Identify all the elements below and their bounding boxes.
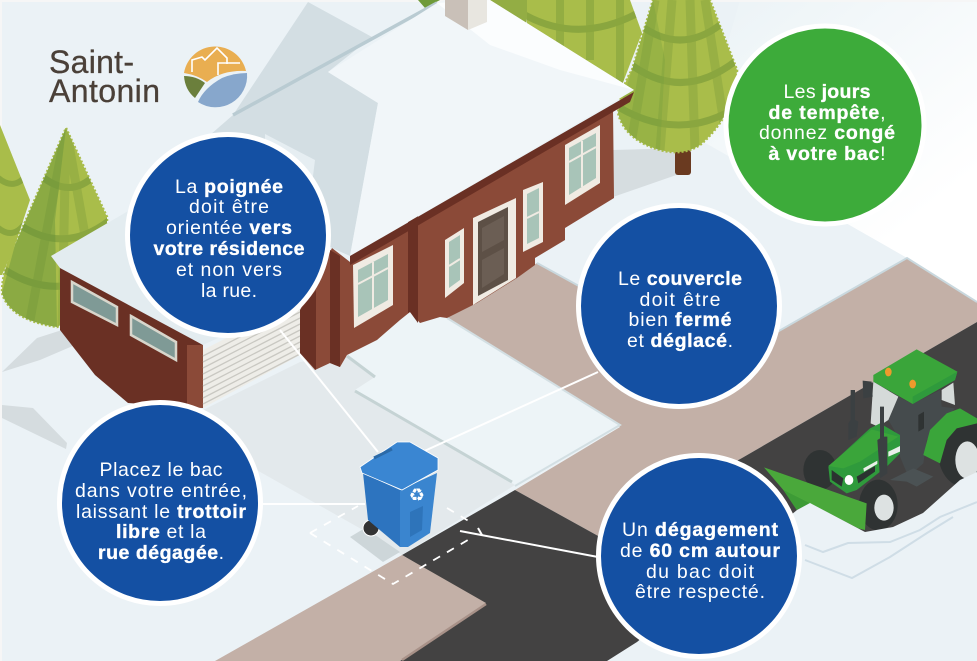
lawn right of walkway — [537, 140, 907, 364]
logo emblem — [184, 46, 247, 107]
callout: poignée: La poignée — [175, 176, 283, 198]
tree: left — [2, 128, 115, 330]
chimney — [445, 0, 487, 30]
bin body right — [400, 473, 437, 547]
callout: jours de tempête: à votre bac! — [768, 143, 886, 165]
callout: placez le bac: laissant le trottoir — [76, 501, 246, 523]
bin handle recess — [410, 506, 423, 537]
cab — [888, 390, 955, 477]
rear wheel — [938, 417, 977, 487]
front wheel — [859, 480, 898, 530]
callout: jours de tempête — [726, 26, 924, 224]
dashed 60 cm clearance — [310, 506, 473, 584]
callout: dégagement: du bac doit — [646, 561, 755, 583]
garage roof — [51, 175, 300, 345]
fender — [923, 408, 977, 463]
callout: dégagement — [598, 456, 800, 656]
beacons — [885, 368, 916, 388]
callout: poignée: orientée vers — [166, 217, 292, 239]
hood — [828, 423, 900, 493]
callout: placez le bac: rue dégagée. — [98, 542, 224, 564]
callout: poignée: doit être — [189, 196, 269, 218]
main roof — [328, 0, 634, 256]
cab door window — [918, 412, 924, 432]
logo — [49, 44, 247, 109]
sidewalk and walkway — [447, 258, 977, 537]
snow pile — [607, 472, 977, 661]
exhausts — [848, 390, 887, 478]
callout: couvercle — [578, 206, 780, 406]
door — [473, 198, 516, 305]
callout: couvercle: bien fermé — [628, 309, 732, 331]
callout: poignée — [128, 134, 328, 336]
window 2 — [445, 228, 464, 298]
callout: poignée: votre résidence — [154, 238, 305, 260]
lower sidewalk — [215, 555, 486, 661]
callout: dégagement: être respecté. — [635, 581, 765, 603]
house — [51, 0, 634, 408]
logo wordmark — [49, 44, 160, 109]
window 4 — [565, 125, 600, 205]
garage door — [203, 300, 300, 408]
callout: placez le bac: dans votre entrée, — [75, 480, 247, 502]
mirror — [863, 381, 873, 398]
logo wordmark: Saint- — [49, 44, 134, 80]
callout: jours de tempête: de tempête, — [768, 102, 886, 124]
logo wordmark: Antonin — [49, 73, 160, 109]
driveway — [203, 312, 620, 555]
shadows on snow — [2, 330, 75, 449]
plow — [764, 467, 867, 530]
garage window 2 — [131, 316, 176, 360]
callout: placez le bac — [60, 402, 260, 604]
blue recycling bin — [350, 442, 438, 562]
far front wheel — [803, 450, 837, 490]
tractor with plow — [764, 349, 977, 530]
bin lid — [360, 442, 438, 490]
garage pillar — [187, 345, 203, 408]
garage wall — [60, 262, 203, 408]
callout: jours de tempête: Les jours — [784, 81, 871, 103]
callout: poignée: la rue. — [201, 280, 257, 302]
main walls — [300, 108, 614, 370]
callout: placez le bac: libre et la — [116, 521, 206, 543]
ridge — [233, 3, 437, 115]
cab glass — [871, 382, 898, 427]
eave — [350, 92, 634, 265]
chassis step — [890, 468, 933, 487]
callout: dégagement: Un dégagement — [622, 519, 778, 541]
road — [400, 322, 977, 661]
lid hinge — [374, 449, 392, 458]
main roof shaded face — [210, 2, 378, 256]
callout: poignée: et non vers — [176, 259, 282, 281]
window 3 — [523, 182, 543, 252]
callout: couvercle: et déglacé. — [627, 330, 733, 352]
recycle symbol: ♻ — [409, 485, 425, 506]
back trees — [418, 0, 642, 85]
callout: couvercle: Le couvercle — [618, 268, 742, 290]
callout: jours de tempête: donnez congé — [759, 122, 895, 144]
window 1 — [353, 245, 393, 328]
roof piece behind callout — [265, 134, 315, 240]
tree: far left — [0, 125, 30, 275]
bin wheel — [363, 520, 379, 536]
callout: couvercle: doit être — [640, 289, 720, 311]
garage window 1 — [72, 282, 117, 325]
leader lines — [263, 330, 598, 557]
wall columns — [300, 209, 418, 370]
roof — [873, 349, 957, 404]
bin body left — [363, 473, 400, 547]
bin shadow — [350, 528, 400, 562]
callout: placez le bac: Placez le bac — [100, 459, 223, 481]
callout: dégagement: de 60 cm autour — [620, 540, 780, 562]
tree: right of house — [613, 0, 740, 197]
